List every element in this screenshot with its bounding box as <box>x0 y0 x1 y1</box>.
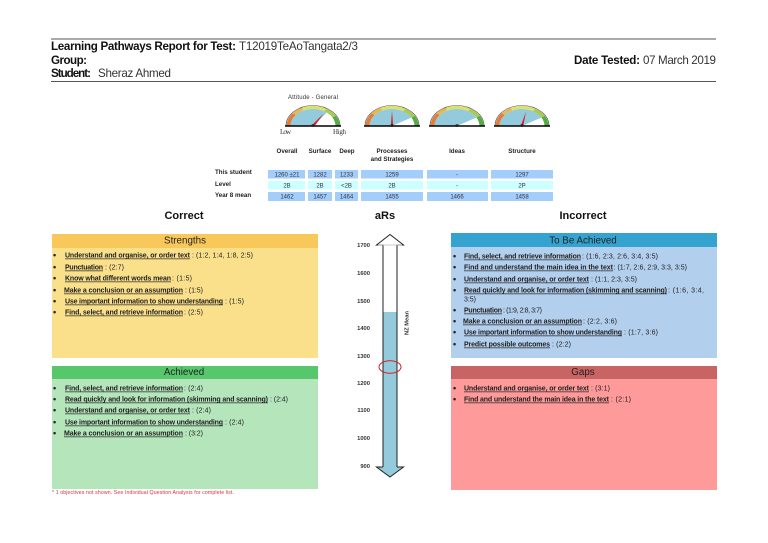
gauge title: Attitude - General <box>288 95 338 101</box>
score table: 1458 <box>515 195 529 201</box>
panel: achieved: Find, select, and retrieve information <box>65 386 183 392</box>
panel: achieved: Understand and organise, or order text <box>65 408 191 414</box>
panel: to be achieved: : (1:9, 2:8, 3:7) <box>503 308 542 314</box>
score table: 2B <box>316 184 324 190</box>
panel: gaps: Find and understand the main idea in the text <box>464 396 610 404</box>
thermometer scale: 1700 <box>357 243 370 249</box>
gauge: structure <box>494 105 550 127</box>
panel: strengths: : (1:5) <box>225 298 244 306</box>
panel: strengths: Find, select, and retrieve information <box>65 310 183 316</box>
panel: to be achieved: • <box>453 262 456 272</box>
score table column headings: Structure <box>508 148 536 155</box>
panel: to be achieved: • <box>453 339 456 349</box>
score table column headings: Processes <box>377 148 408 155</box>
panel: to be achieved: : (1:6, 3:4, <box>668 288 704 294</box>
gauge scale labels: Low <box>280 128 292 136</box>
panel: strengths: Make a conclusion or an assumption <box>64 288 183 294</box>
thermometer scale: 1600 <box>357 271 370 277</box>
thermometer scale: 1300 <box>357 354 370 360</box>
score table: 1259 <box>385 172 399 178</box>
panel: strengths: • <box>53 296 56 306</box>
report header: Student: <box>51 67 91 80</box>
panel: to be achieved: : (1:6, 2:3, 2:6, 3:4, 3:5) <box>582 254 658 260</box>
panel: strengths <box>52 234 318 358</box>
panel: to be achieved: • <box>453 316 456 326</box>
panel: to be achieved: 3:5) <box>464 296 476 304</box>
score table <box>215 169 553 201</box>
panel: to be achieved: Use important information to show understanding <box>464 330 622 336</box>
report header: Sheraz Ahmed <box>98 67 171 80</box>
score table: - <box>456 172 458 178</box>
panel: to be achieved: Make a conclusion or an assumption <box>463 318 582 326</box>
panel: strengths: : (2:5) <box>184 310 203 316</box>
score table: 1260 ±21 <box>275 172 300 178</box>
panel: to be achieved: • <box>453 327 456 337</box>
report header: 07 March 2019 <box>643 54 716 67</box>
panel: achieved: : (2:4) <box>192 408 211 414</box>
gauge: processes and strategies <box>364 105 420 127</box>
score table: 1462 <box>280 195 294 201</box>
panel: to be achieved: • <box>453 305 456 315</box>
panel: to be achieved: : (2:2, 3:6) <box>583 318 617 326</box>
panel: strengths: : (1:2, 1:4, 1:8, 2:5) <box>192 252 253 260</box>
panel: gaps: Gaps <box>571 367 595 378</box>
thermometer scale: 1100 <box>357 408 370 414</box>
footnote: * 1 objectives not shown. See Individual Question Analysis for complete list. <box>52 490 234 496</box>
panel: achieved: Achieved <box>164 367 204 378</box>
score table column headings: Surface <box>309 148 332 155</box>
score table: 1297 <box>515 172 529 178</box>
thermometer scale: 1500 <box>357 299 370 305</box>
panel: strengths: Use important information to show understanding <box>65 298 223 306</box>
panel: gaps <box>451 366 717 490</box>
score table column headings: and Strategies <box>371 156 414 163</box>
thermometer scale: 900 <box>360 464 370 470</box>
report header: Date Tested: <box>574 54 640 67</box>
panel: to be achieved: Punctuation <box>464 308 502 314</box>
score table: Level <box>215 181 231 188</box>
gauge scale labels: High <box>333 128 346 136</box>
panel: achieved: : (2:4) <box>270 396 288 404</box>
panel: strengths: : (2:7) <box>105 264 124 272</box>
thermometer arrow <box>376 234 404 477</box>
score table column headings: Ideas <box>449 148 465 155</box>
report header: T12019TeAoTangata2/3 <box>239 40 358 53</box>
gauge: ideas <box>429 105 485 127</box>
panel: to be achieved: Find and understand the main idea in the text <box>464 264 614 272</box>
panel: gaps: : (3:1) <box>591 386 610 392</box>
panel: strengths: Punctuation <box>65 264 103 272</box>
panel: gaps: • <box>453 394 456 404</box>
score table: Year 8 mean <box>215 192 251 199</box>
panel: achieved: : (2:4) <box>184 386 203 392</box>
panel: to be achieved: : (1:7, 2:6, 2:9, 3:3, 3:5) <box>614 264 687 272</box>
panel: to be achieved: Understand and organise, or order text <box>464 276 590 284</box>
panel: achieved: Read quickly and look for information (skimming and scanning) <box>65 396 268 404</box>
panel: gaps: : (2:1) <box>611 396 631 404</box>
panel: to be achieved: : (1:1, 2:3, 3:5) <box>591 276 637 284</box>
panel: gaps: Understand and organise, or order text <box>464 386 590 392</box>
panel: achieved: : (3:2) <box>185 430 203 438</box>
score table: 1455 <box>385 195 399 201</box>
panel: achieved: : (2:4) <box>225 420 244 426</box>
heading: incorrect: Incorrect <box>559 210 607 222</box>
score table: 1282 <box>313 172 327 178</box>
score table: 1466 <box>450 195 464 201</box>
report header: Learning Pathways Report for Test: <box>51 40 236 53</box>
panel: strengths: • <box>53 307 56 317</box>
student score marker <box>379 361 401 373</box>
panel: to be achieved: • <box>453 274 456 284</box>
panel: achieved: • <box>53 417 56 427</box>
panel: to be achieved <box>451 233 717 358</box>
score table column headings: Overall <box>277 148 298 155</box>
score table column headings <box>277 148 536 163</box>
panel: achieved: • <box>53 405 56 415</box>
panel: to be achieved: Find, select, and retrieve information <box>464 254 581 260</box>
thermometer scale: 1000 <box>357 436 370 442</box>
panel: strengths: Strengths <box>164 236 206 246</box>
heading: correct: Correct <box>164 210 204 222</box>
panel: to be achieved: • <box>453 285 456 295</box>
panel: strengths: • <box>53 250 56 260</box>
panel: strengths: Know what different words mean <box>65 276 171 282</box>
gauge scale labels <box>280 128 346 136</box>
panel: to be achieved: : (2:2) <box>552 342 571 348</box>
score table: <2B <box>341 184 352 190</box>
panel: achieved <box>52 366 318 489</box>
score table: - <box>456 184 458 190</box>
panel: strengths: : (1:5) <box>172 276 192 282</box>
panel: achieved: Make a conclusion or an assumption <box>64 430 183 438</box>
thermometer scale: 1400 <box>357 326 370 332</box>
report header: Group: <box>51 54 87 67</box>
report header <box>51 40 716 80</box>
score table: 1233 <box>340 172 354 178</box>
heading: aRs: aRs <box>375 210 395 222</box>
panel: strengths: Understand and organise, or order text <box>65 252 191 260</box>
panel: achieved: Use important information to show understanding <box>65 420 223 426</box>
panel: to be achieved: Read quickly and look for information (skimming and scanning) <box>464 288 667 294</box>
panel: to be achieved: To Be Achieved <box>549 235 617 246</box>
score table: 2B <box>388 184 396 190</box>
panel: achieved: • <box>53 383 56 393</box>
panel: strengths: • <box>53 285 56 295</box>
score table: 1457 <box>313 195 327 201</box>
gauge: overall <box>285 105 341 127</box>
panel: to be achieved: Predict possible outcomes <box>464 342 550 348</box>
score table column headings: Deep <box>339 148 355 155</box>
score table: 2P <box>518 184 526 190</box>
panel: gaps: • <box>453 383 456 393</box>
score table: This student <box>215 169 252 176</box>
score table: 2B <box>283 184 291 190</box>
panel: achieved: • <box>53 428 56 438</box>
panel: to be achieved: • <box>453 251 456 261</box>
panel: to be achieved: : (1:7, 3:6) <box>624 330 658 336</box>
panel: strengths: • <box>53 273 56 283</box>
panel: strengths: : (1:5) <box>185 288 203 294</box>
thermometer scale <box>357 243 370 470</box>
label: NZ mean: NZ Mean <box>404 311 410 335</box>
panel: strengths: • <box>53 262 56 272</box>
panel: achieved: • <box>53 394 56 404</box>
thermometer scale: 1200 <box>357 381 370 387</box>
score table: 1464 <box>340 195 354 201</box>
